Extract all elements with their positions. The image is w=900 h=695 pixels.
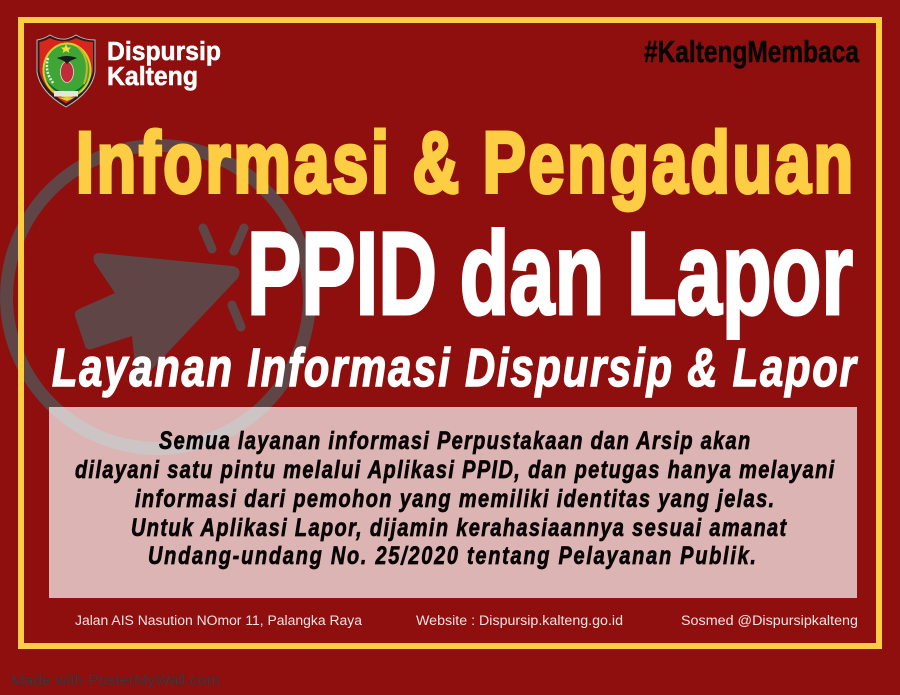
brand name: Kalteng (107, 63, 198, 91)
logo: shield emblem (37, 35, 95, 107)
icon: cursor click in circle (6, 146, 310, 448)
footer contact info (75, 613, 858, 628)
footer contact info: Website : Dispursip.kalteng.go.id (416, 613, 623, 628)
description text: Untuk Aplikasi Lapor, dijamin kerahasiaannya sesuai amanat (131, 514, 787, 542)
subtitle: Layanan Informasi Dispursip & Lapor (52, 338, 858, 398)
brand name: Dispursip (107, 38, 221, 66)
description text: dilayani satu pintu melalui Aplikasi PPID, dan petugas hanya melayani (75, 456, 835, 484)
panel: description (49, 407, 857, 598)
description text: Semua layanan informasi Perpustakaan dan Arsip akan (159, 427, 750, 455)
title: Informasi & Pengaduan: Informasi & Pengaduan (76, 115, 853, 211)
footer contact info: Jalan AIS Nasution NOmor 11, Palangka Raya (75, 613, 362, 628)
description text: Undang-undang No. 25/2020 tentang Pelayanan Publik. (148, 542, 756, 570)
description text (75, 427, 835, 570)
brand name (107, 38, 221, 91)
footer contact info: Sosmed @Dispursipkalteng (681, 613, 858, 628)
description text: informasi dari pemohon yang memiliki identitas yang jelas. (135, 485, 774, 513)
watermark: Made with PosterMyWall.com (11, 672, 220, 689)
